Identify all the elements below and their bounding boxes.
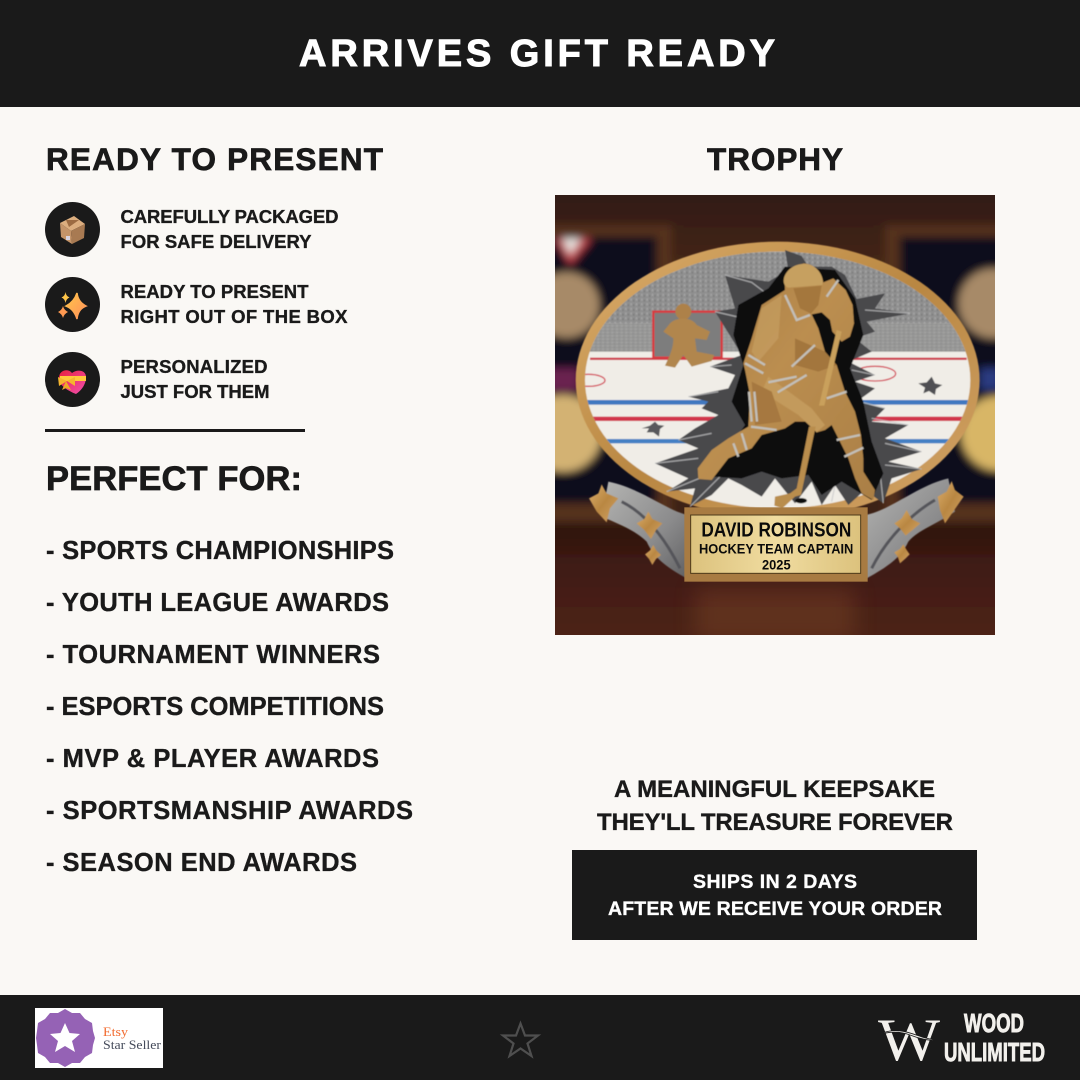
list: award occasions: - SPORTS CHAMPIONSHIPS	[46, 537, 394, 565]
hockey stick	[819, 330, 842, 406]
icon: outline star	[503, 1024, 538, 1056]
heading: trophy: TROPHY	[707, 141, 843, 177]
footer bar	[0, 995, 1080, 1080]
logo: wood unlimited: W	[878, 1007, 940, 1073]
list: award occasions: - MVP & PLAYER AWARDS	[46, 745, 379, 773]
table reflection	[695, 588, 855, 642]
list: award occasions: - ESPORTS COMPETITIONS	[46, 693, 384, 721]
shipping callout: AFTER WE RECEIVE YOUR ORDER	[608, 898, 942, 920]
text: ready to present: READY TO PRESENT	[120, 281, 309, 302]
icon: package box	[45, 202, 100, 257]
heading: ready to present: READY TO PRESENT	[46, 141, 383, 177]
nameplate: DAVID ROBINSON	[701, 520, 851, 542]
oval plaque	[572, 242, 982, 518]
base wings with stars	[589, 478, 964, 578]
text: personalized	[120, 356, 270, 402]
icon: sparkles	[45, 277, 100, 332]
shipping callout	[572, 850, 977, 940]
nameplate: 2025	[762, 557, 791, 573]
shipping callout: SHIPS IN 2 DAYS	[693, 871, 857, 893]
logo: wood unlimited: WOOD	[964, 1008, 1024, 1038]
torn edge highlights	[655, 275, 922, 507]
text: ready to present: RIGHT OUT OF THE BOX	[120, 306, 348, 327]
uniform stripes	[733, 280, 863, 457]
rink stars	[918, 377, 942, 395]
text: ready to present	[120, 281, 348, 327]
list: award occasions: - YOUTH LEAGUE AWARDS	[46, 589, 389, 617]
badge: etsy star seller	[35, 1008, 163, 1068]
body silhouette	[698, 263, 875, 500]
text: personalized: JUST FOR THEM	[120, 381, 270, 402]
text: personalized: PERSONALIZED	[120, 356, 268, 377]
text: carefully packaged: CAREFULLY PACKAGED	[120, 206, 338, 227]
hockey goal with goalie	[653, 304, 722, 368]
feature: carefully packaged	[45, 202, 338, 257]
torn hole	[655, 250, 922, 507]
badge: etsy star seller: Etsy	[103, 1024, 129, 1039]
logo: wood unlimited	[878, 1007, 1045, 1073]
header banner	[0, 0, 1080, 107]
feature: personalized	[45, 352, 270, 407]
title: ARRIVES GIFT READY	[299, 33, 775, 75]
icon: gift heart	[45, 352, 100, 407]
rink lines	[590, 358, 967, 360]
keepsake tagline	[597, 776, 953, 836]
list: award occasions: - TOURNAMENT WINNERS	[46, 641, 380, 669]
badge: etsy star seller: Star Seller	[103, 1038, 162, 1052]
face shadow	[793, 286, 822, 314]
photo: hockey trophy	[555, 195, 995, 635]
body shading	[752, 295, 782, 362]
player figure	[698, 263, 875, 508]
trophy body	[572, 242, 982, 578]
list: award occasions: - SEASON END AWARDS	[46, 849, 357, 877]
keepsake tagline: THEY'LL TREASURE FOREVER	[597, 809, 953, 836]
feature: ready to present	[45, 277, 348, 332]
text: carefully packaged	[120, 206, 338, 252]
nameplate	[684, 507, 868, 582]
text: carefully packaged: FOR SAFE DELIVERY	[120, 231, 312, 252]
arena crowd band	[604, 251, 950, 324]
nameplate: HOCKEY TEAM CAPTAIN	[699, 541, 853, 557]
helmet	[784, 264, 823, 288]
list: award occasions: - SPORTSMANSHIP AWARDS	[46, 797, 413, 825]
blurred background	[555, 195, 995, 635]
icon: purple star seal	[36, 1009, 95, 1067]
list: award occasions	[46, 537, 413, 877]
keepsake tagline: A MEANINGFUL KEEPSAKE	[614, 776, 935, 803]
heading: perfect for: PERFECT FOR:	[46, 460, 302, 498]
